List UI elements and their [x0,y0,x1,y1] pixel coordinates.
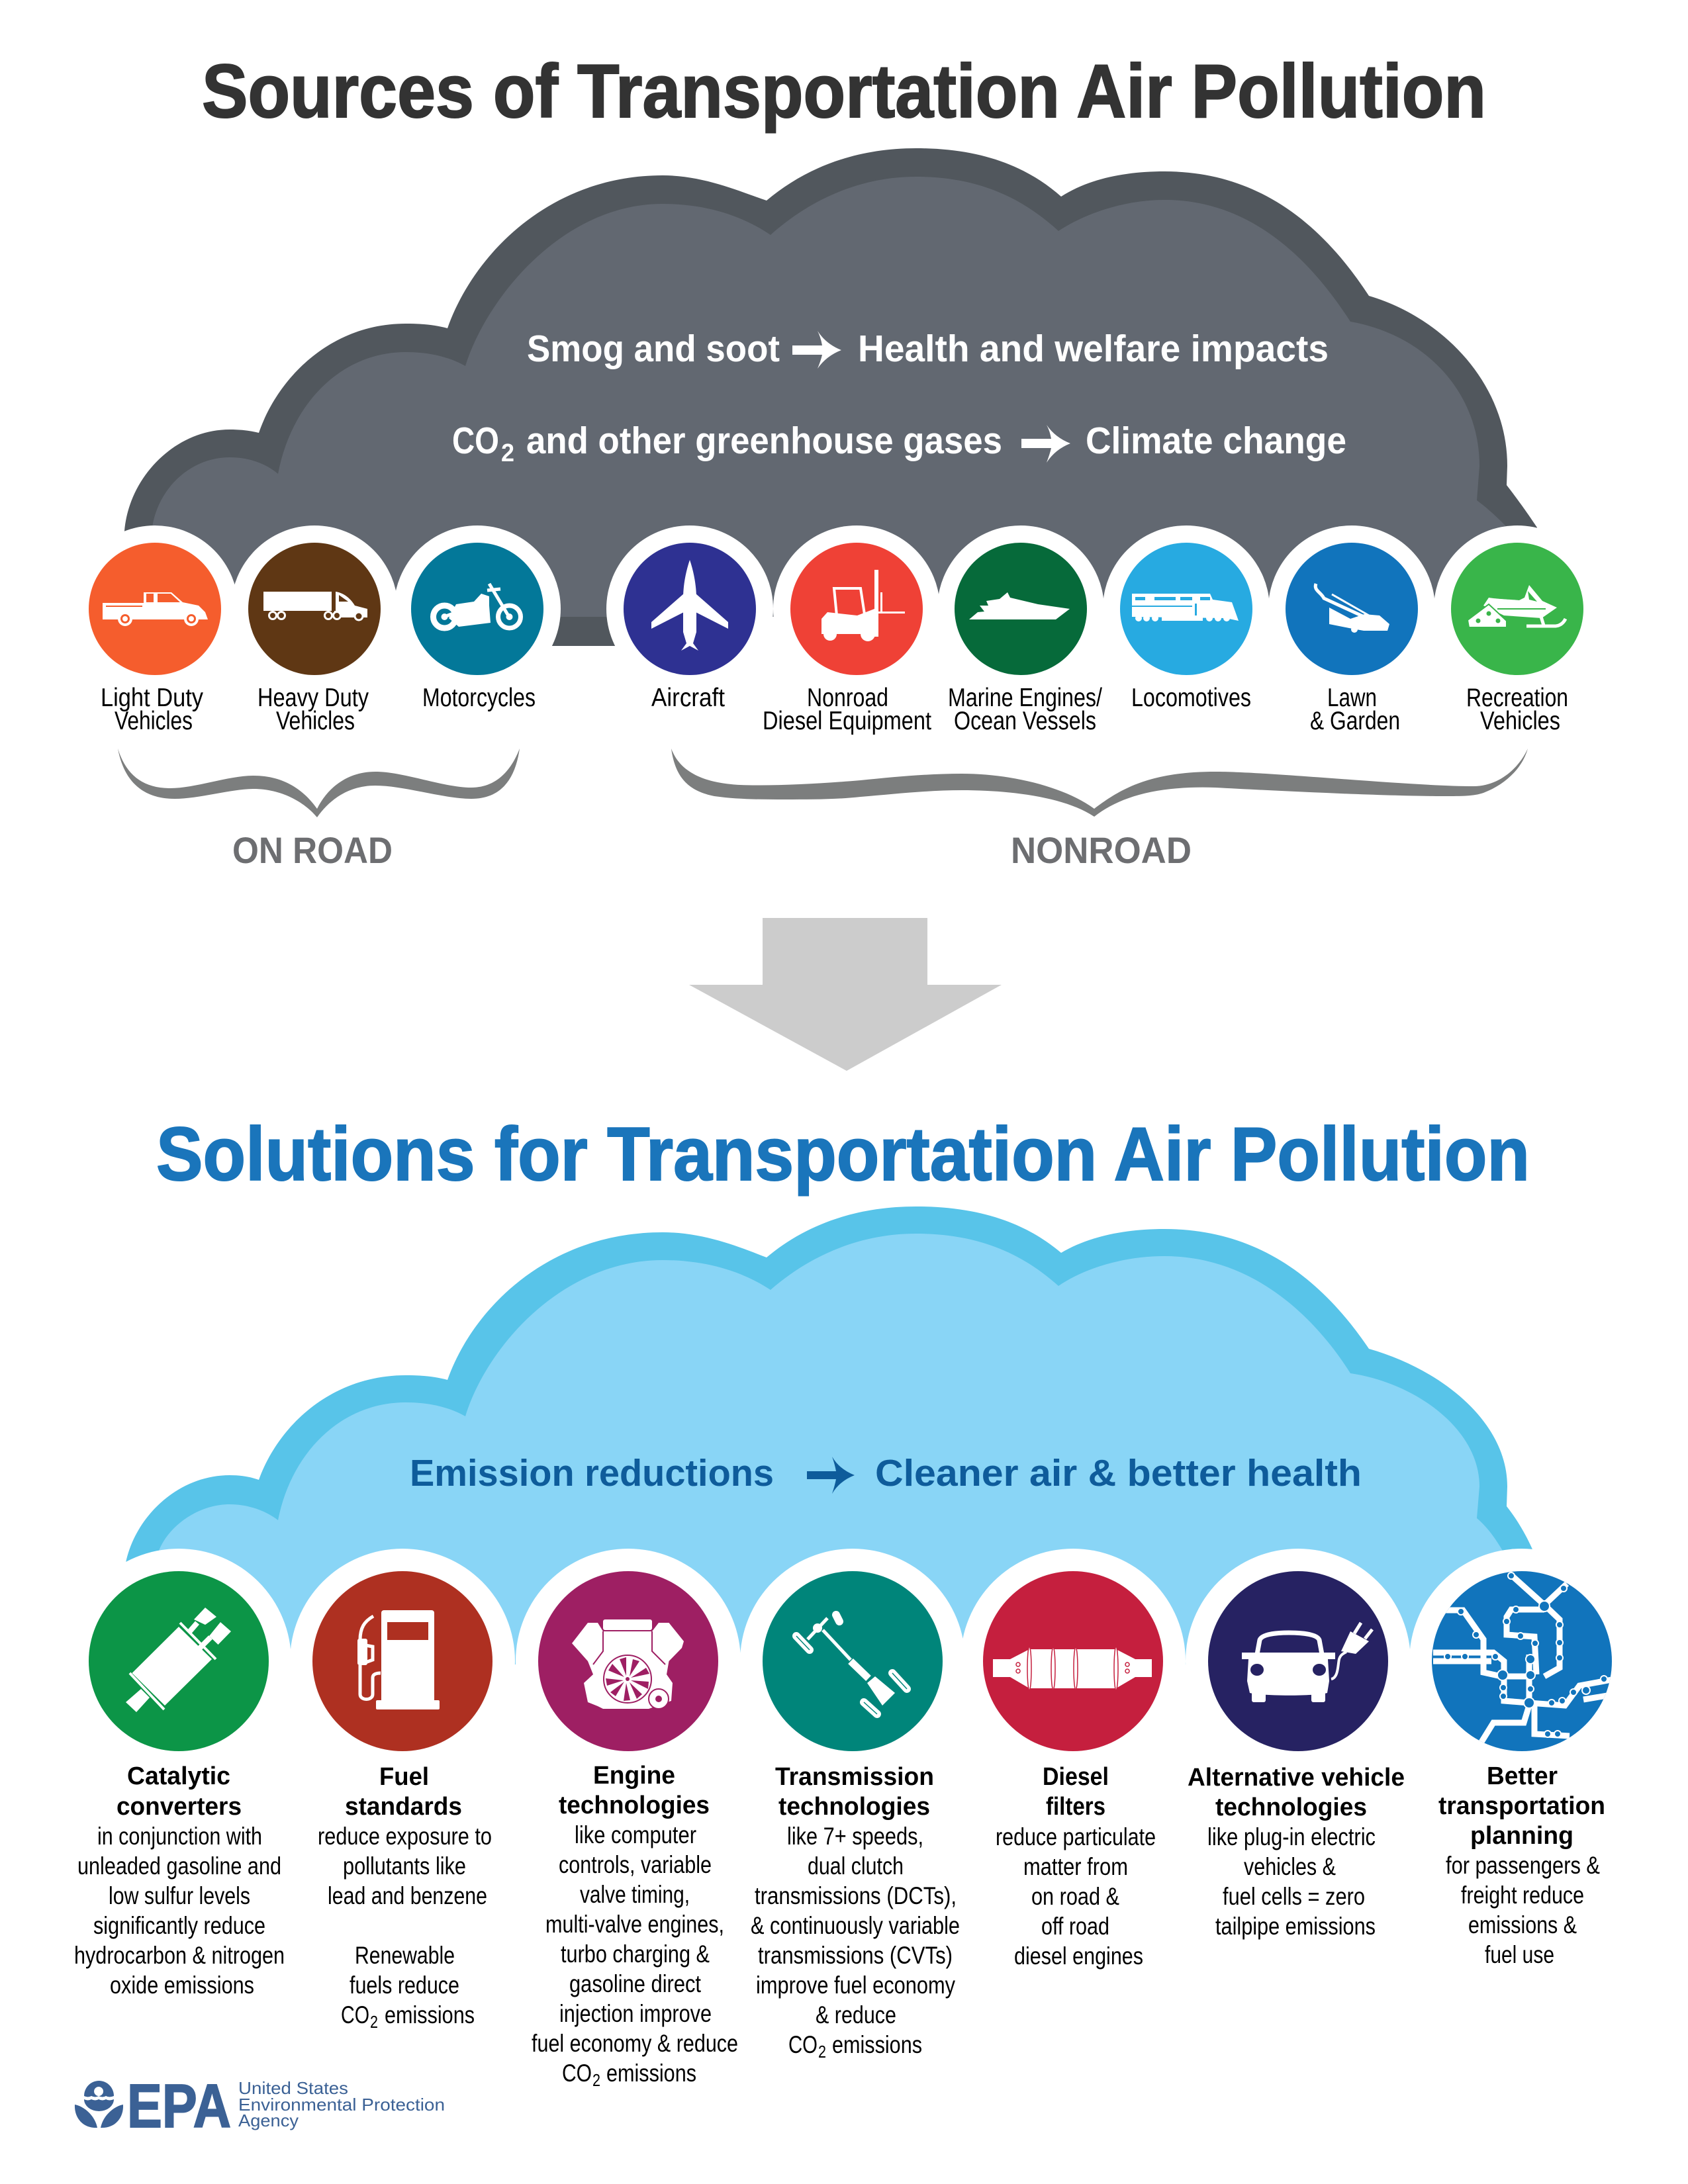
source: lawn and garden [1268,525,1435,735]
solution: diesel filters [961,1549,1186,1970]
text: transmission technologies: CO [788,2031,818,2058]
text: transmission technologies: & reduce [816,2001,896,2028]
text: catalytic converters: unleaded gasoline and [77,1852,281,1880]
icon: lawn mower [1315,584,1389,633]
source: marine engines and ocean vessels [937,525,1104,735]
label: heavy duty vehicles [258,684,369,735]
text: fuel standards: lead and benzene [328,1882,487,1909]
heading: nonroad: NONROAD [1011,829,1192,871]
cloud text: emission reductions: Cleaner air & better health [875,1452,1362,1494]
text: transmission technologies: Transmission [775,1763,934,1791]
text: transmission technologies: emissions [832,2031,922,2058]
cloud text: greenhouse gases: CO [452,420,499,462]
text: engine technologies: emissions [606,2060,696,2087]
icon: catalytic converter [126,1608,231,1712]
text: engine technologies: turbo charging & [561,1940,710,1968]
source: locomotives [1103,525,1270,712]
icon: transit map [1433,1572,1615,1751]
text: fuel standards: reduce exposure to [318,1823,492,1850]
icon: EPA flower mark [75,2081,123,2128]
text: engine technologies: CO [562,2060,592,2087]
label: aircraft: Aircraft [651,684,725,712]
wordmark: EPA: EPA [127,2071,231,2140]
label: light duty vehicles [101,684,203,735]
text: transmission technologies: 2 [818,2042,826,2062]
text: better transportation planning: for passengers & [1446,1852,1600,1879]
text: alternative vehicle technologies: technologies [1215,1794,1367,1821]
text: better transportation planning: emissions & [1468,1911,1577,1938]
text: fuel standards: standards [345,1793,462,1821]
text: diesel filters [996,1763,1156,1970]
text: transmission technologies: dual clutch [808,1852,904,1880]
text: better transportation planning: Better [1487,1762,1558,1790]
text: fuel standards: Renewable [355,1942,455,1969]
cloud text: emission reductions: Emission reductions [410,1452,774,1494]
text: catalytic converters: oxide emissions [110,1972,254,1999]
text: agency name [238,2078,445,2130]
text: diesel filters: Diesel [1043,1763,1109,1791]
cloud text: greenhouse gases: 2 [501,439,514,467]
title: solutions: Solutions for Transportation Air Pollution [156,1113,1530,1197]
solution: transmission technologies [740,1549,965,2062]
cloud text: smog and soot: Smog and soot [527,328,780,370]
text: alternative vehicle technologies: like plug-in electric [1207,1823,1376,1850]
text: engine technologies: Engine [593,1762,675,1790]
text: diesel filters: reduce particulate [996,1823,1156,1850]
text: catalytic converters: converters [117,1793,242,1821]
label: nonroad diesel equipment: Diesel Equipment [763,707,931,735]
logo: EPA [75,2071,445,2140]
text: diesel filters: diesel engines [1014,1942,1143,1970]
text: catalytic converters: in conjunction with [97,1823,262,1850]
cloud text: smog and soot [527,328,1329,370]
icon: plug-in electric car [1242,1623,1372,1702]
solution: fuel standards [290,1549,515,2032]
text: fuel standards: CO [341,2001,369,2028]
icon: locomotive [1132,594,1239,621]
source: nonroad diesel equipment [763,525,940,735]
source: aircraft [606,525,773,712]
source: recreation vehicles [1434,525,1601,735]
text: agency name: Agency [238,2111,299,2130]
label: recreation vehicles: Recreation [1466,684,1568,712]
label: locomotives: Locomotives [1131,684,1251,712]
text: diesel filters: off road [1041,1913,1109,1940]
label: lawn and garden: Lawn [1327,684,1377,712]
label: recreation vehicles [1466,684,1568,735]
text: engine technologies [532,1762,738,2090]
text: fuel standards: Fuel [379,1763,429,1791]
text: engine technologies: fuel economy & reduce [532,2030,738,2057]
source: motorcycles [394,525,561,712]
text: alternative vehicle technologies: vehicles & [1244,1853,1336,1880]
text: diesel filters: on road & [1031,1883,1119,1910]
source: light duty vehicles [71,525,238,735]
cloud text: emission reductions [410,1452,1362,1494]
text: fuel standards [318,1763,492,2032]
icon: semi truck [263,592,367,620]
label: nonroad diesel equipment: Nonroad [807,684,888,712]
text: better transportation planning: freight reduce [1461,1882,1584,1909]
text: engine technologies: like computer [575,1821,696,1848]
icon: forklift [821,570,905,641]
text: transmission technologies: like 7+ speeds, [787,1823,923,1850]
icon: snowmobile [1468,585,1566,627]
text: transmission technologies: improve fuel economy [756,1972,955,1999]
text: engine technologies: multi-valve engines, [545,1911,724,1938]
solution: alternative vehicle technologies [1186,1549,1411,1940]
solution: engine technologies [516,1549,741,2090]
text: fuel standards: fuels reduce [350,1972,459,1999]
label: lawn and garden [1310,684,1400,735]
text: agency name: Environmental Protection [238,2095,445,2115]
text: catalytic converters: low sulfur levels [109,1882,250,1909]
label: marine engines and ocean vessels: Marine Engines/ [948,684,1102,712]
text: transmission technologies: transmissions (DCTs), [755,1882,957,1909]
label: motorcycles: Motorcycles [422,684,536,712]
icon: diesel particulate filter [993,1647,1152,1690]
panel: dark pollution cloud [124,148,1537,646]
text: better transportation planning: planning [1470,1822,1573,1850]
text: catalytic converters: Catalytic [127,1762,230,1790]
label: light duty vehicles: Light Duty [101,684,203,712]
text: transmission technologies: transmissions (CVTs) [758,1942,953,1969]
text: diesel filters: matter from [1023,1853,1128,1880]
text: fuel standards: pollutants like [343,1852,466,1880]
icon: engine [572,1619,684,1709]
heading: on road: ON ROAD [232,829,393,871]
label: recreation vehicles: Vehicles [1480,707,1560,735]
text: alternative vehicle technologies: Alternative vehicle [1188,1764,1405,1792]
cloud text: smog and soot: Health and welfare impacts [858,328,1329,370]
text: transmission technologies [751,1763,960,2062]
solution: better transportation planning [1410,1549,1612,1963]
icon: airplane [651,560,728,651]
cloud text: greenhouse gases: and other greenhouse gases [526,420,1002,462]
label: light duty vehicles: Vehicles [115,707,193,735]
icon: pickup truck [103,592,208,626]
arrow: sources to solutions [689,918,1002,1071]
text: engine technologies: technologies [559,1792,710,1819]
text: engine technologies: injection improve [559,2000,712,2027]
text: engine technologies: gasoline direct [569,1970,702,1997]
text: catalytic converters [74,1762,285,1999]
icon: yacht [969,592,1070,619]
text: better transportation planning: transportation [1438,1792,1605,1820]
text: agency name: United States [238,2078,348,2098]
brace: nonroad [671,749,1528,817]
icon: fuel pump [357,1610,440,1709]
label: marine engines and ocean vessels [948,684,1102,735]
icon: motorcycle [433,584,520,628]
cloud text: greenhouse gases [452,420,1346,467]
text: better transportation planning [1438,1762,1605,1968]
text: diesel filters: filters [1046,1793,1105,1821]
text: fuel standards: emissions [385,2001,475,2028]
text: transmission technologies: & continuously variable [751,1912,960,1939]
cloud text: greenhouse gases: Climate change [1086,420,1346,462]
text: engine technologies: 2 [592,2070,600,2090]
text: fuel standards: 2 [370,2012,378,2032]
brace: on road [118,749,520,817]
text: catalytic converters: hydrocarbon & nitrogen [74,1942,285,1969]
panel: light blue cloud [126,1206,1532,1664]
solution: catalytic converters [66,1549,291,1999]
text: alternative vehicle technologies: fuel cells = zero [1223,1883,1365,1910]
label: lawn and garden: & Garden [1310,707,1400,735]
text: alternative vehicle technologies [1188,1764,1405,1940]
icon: drivetrain [796,1615,907,1714]
text: catalytic converters: significantly reduce [93,1912,265,1939]
label: heavy duty vehicles: Vehicles [276,707,355,735]
text: engine technologies: valve timing, [580,1881,690,1908]
label: nonroad diesel equipment [763,684,931,735]
source: heavy duty vehicles [231,525,398,735]
text: alternative vehicle technologies: tailpipe emissions [1215,1913,1376,1940]
title: sources: Sources of Transportation Air Pollution [202,50,1486,134]
text: transmission technologies: technologies [778,1793,930,1821]
text: better transportation planning: fuel use [1485,1941,1554,1968]
text: engine technologies: controls, variable [559,1851,712,1878]
label: marine engines and ocean vessels: Ocean Vessels [954,707,1096,735]
label: heavy duty vehicles: Heavy Duty [258,684,369,712]
